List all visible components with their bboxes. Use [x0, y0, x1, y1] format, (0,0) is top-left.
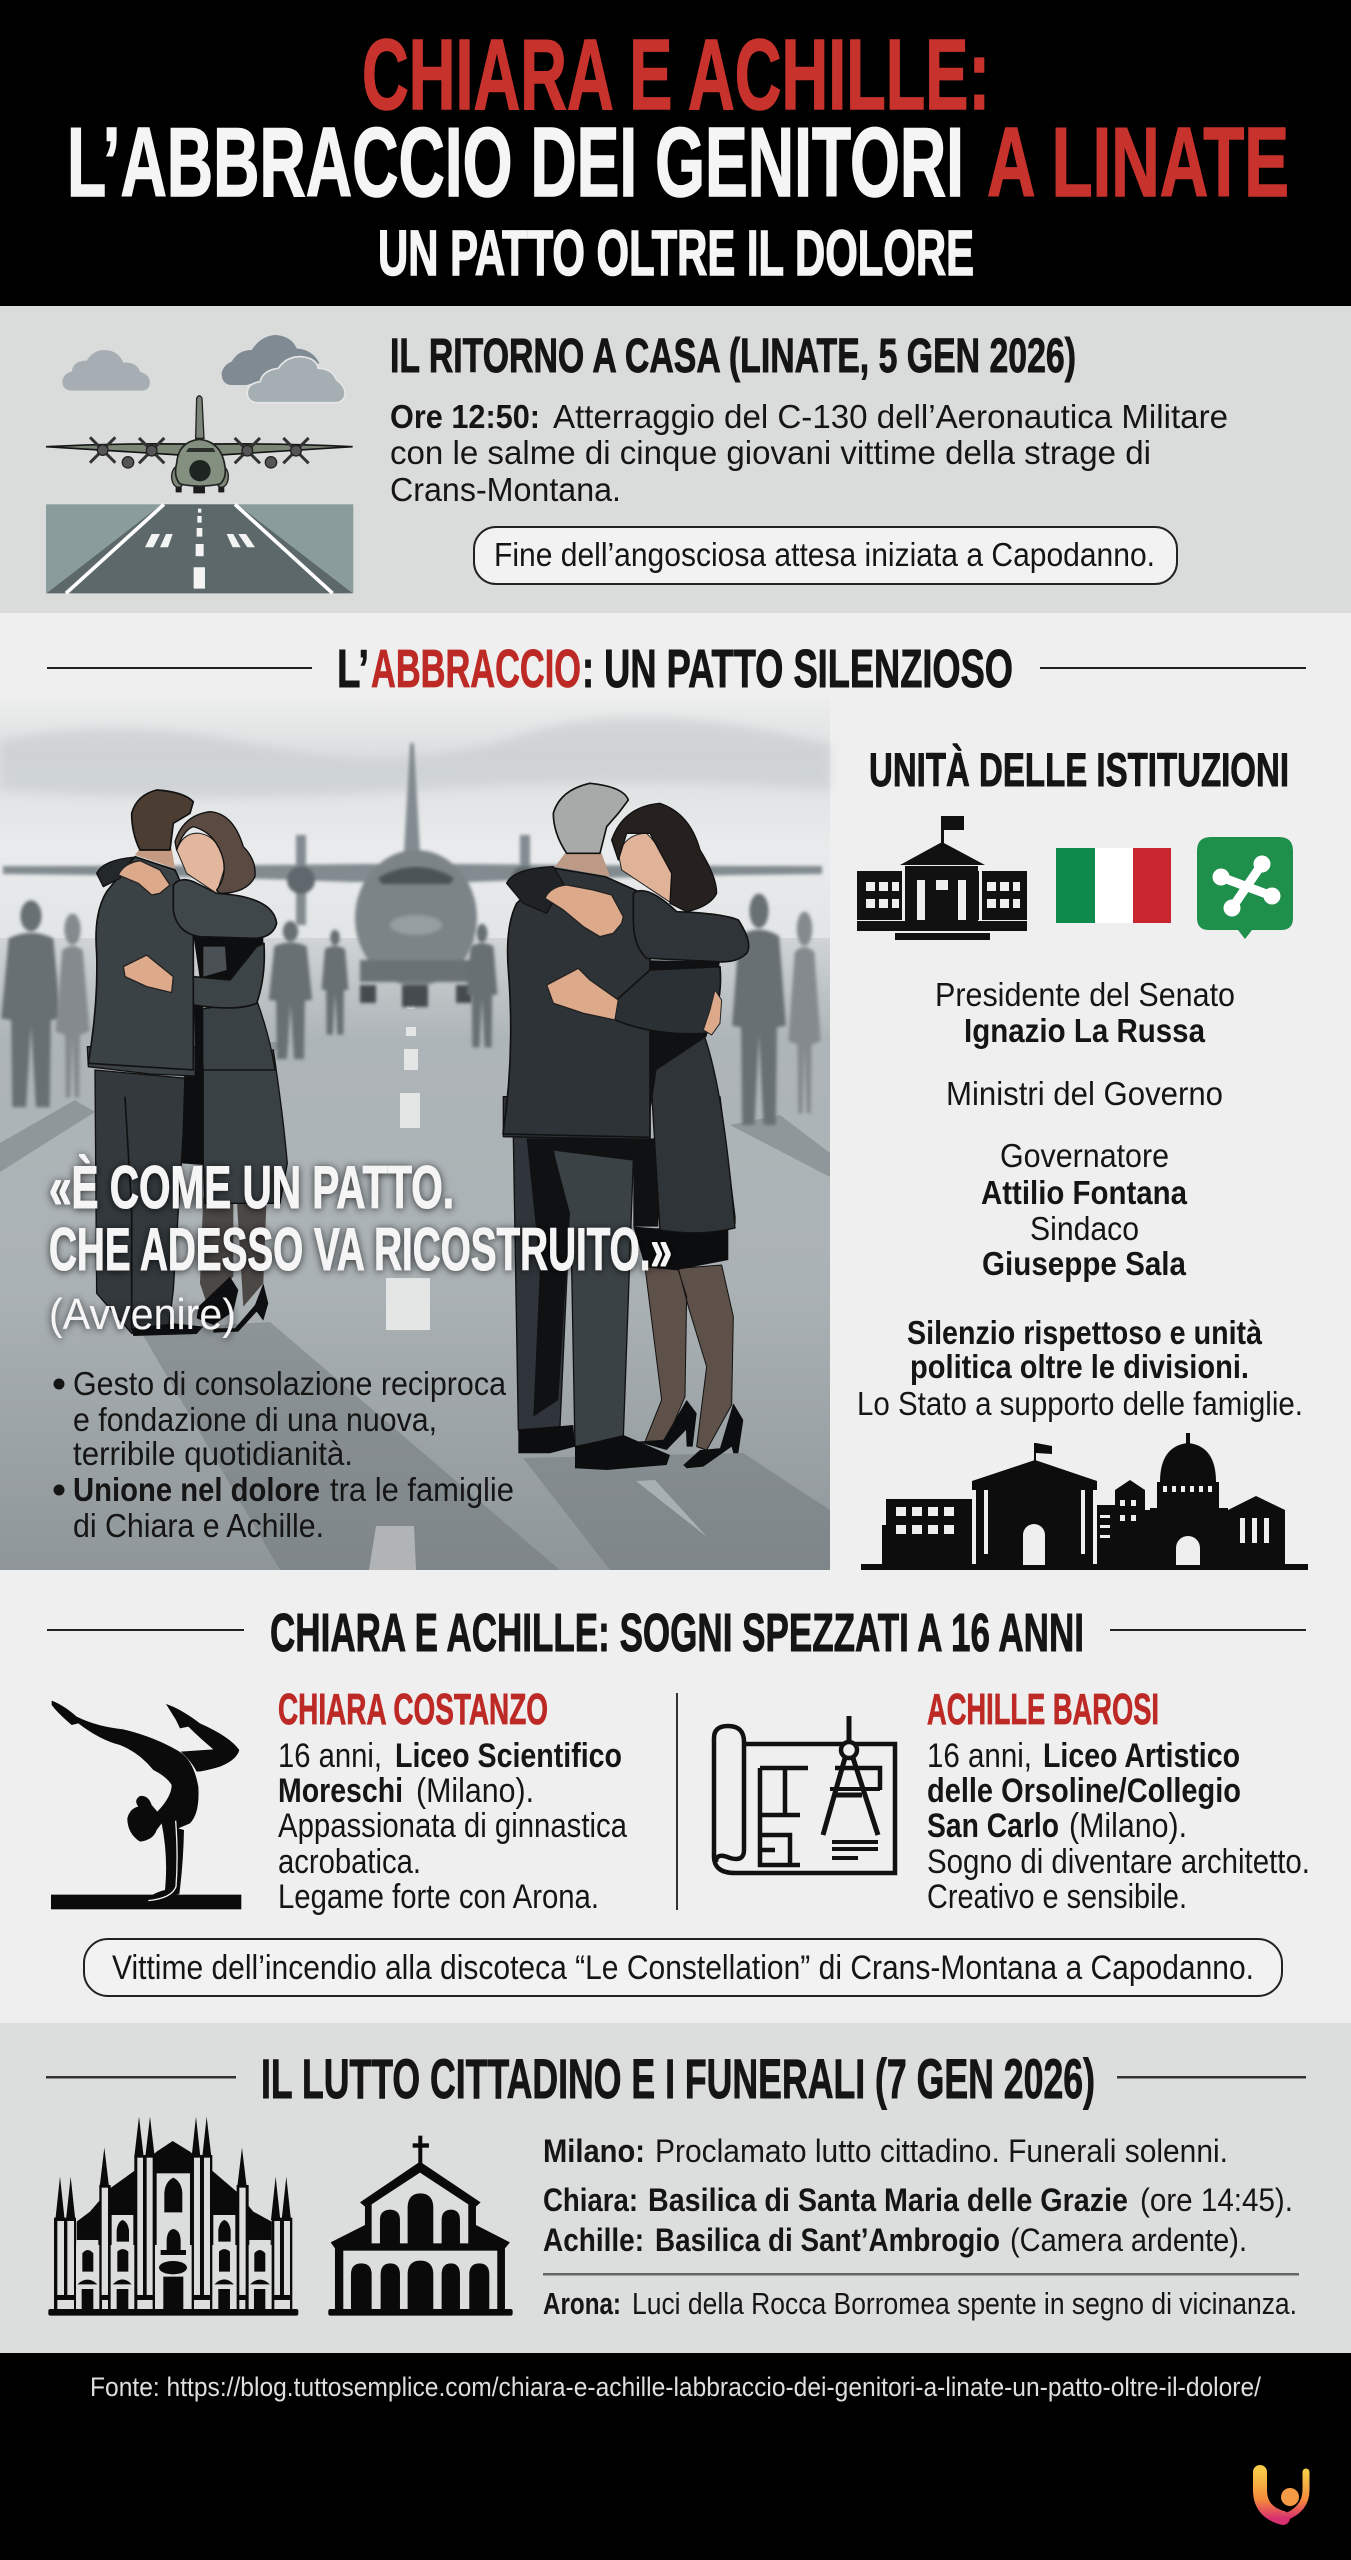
quote: CHE ADESSO VA RICOSTRUITO.»: [49, 1216, 672, 1283]
icon: duomo di milano: [48, 2117, 298, 2316]
text: achille barosi: 16 anni,: [927, 1737, 1032, 1775]
illustration: genitori abbracciati sulla pista: [0, 693, 830, 1570]
quote: [49, 1154, 672, 1339]
callout: fine dell'attesa: Fine dell’angosciosa attesa iniziata a Capodanno.: [494, 536, 1155, 573]
text: chiara e achille funerali: Basilica di Sant’Ambrogio: [655, 2222, 1000, 2258]
text: chiara e achille funerali: (ore 14:45).: [1140, 2182, 1293, 2218]
text: chiara e achille funerali: (Camera ardente).: [1010, 2222, 1247, 2258]
text: autorità presenti: Ignazio La Russa: [964, 1012, 1206, 1049]
text: autorità presenti: Ministri del Governo: [946, 1075, 1223, 1112]
icon: government building: [857, 816, 1027, 940]
panel: lutto cittadino e funerali: [0, 2023, 1351, 2353]
header title: [67, 19, 1289, 289]
text: chiara costanzo: Appassionata di ginnastica: [278, 1807, 627, 1845]
text: chiara costanzo: 16 anni,: [278, 1737, 382, 1775]
text: atterraggio: con le salme di cinque giovani vittime della strage di: [390, 434, 1151, 471]
text: autorità presenti: Silenzio rispettoso e unità: [907, 1314, 1263, 1351]
text: achille barosi: San Carlo: [927, 1807, 1059, 1845]
text: chiara costanzo: Moreschi: [278, 1772, 403, 1810]
couple: left, upper body: [88, 790, 277, 1070]
panel: l'abbraccio: [0, 613, 1351, 1590]
text: autorità presenti: Lo Stato a supporto delle famiglie.: [857, 1385, 1303, 1422]
text: achille barosi: ACHILLE BAROSI: [927, 1685, 1159, 1734]
text: chiara e achille funerali: Basilica di Santa Maria delle Grazie: [648, 2182, 1128, 2218]
bullets: gesto di consolazione: di Chiara e Achille.: [73, 1507, 324, 1544]
bullets: gesto di consolazione: [54, 1365, 514, 1544]
background plane: [3, 742, 822, 1007]
icon: skyline: [861, 1433, 1308, 1570]
callout: vittime dell'incendio: [84, 1939, 1282, 1996]
text: achille barosi: [927, 1685, 1310, 1916]
text: milano: Milano:: [543, 2133, 645, 2169]
icon: logo: [1260, 2472, 1306, 2518]
quote: (Avvenire): [49, 1290, 236, 1339]
text: achille barosi: (Milano).: [1069, 1807, 1187, 1845]
text: achille barosi: delle Orsoline/Collegio: [927, 1772, 1241, 1810]
text: milano: Proclamato lutto cittadino. Funerali solenni.: [655, 2133, 1228, 2169]
icon: clouds, plane and runway: [46, 335, 353, 593]
icon: blueprint and compass: [714, 1716, 895, 1873]
icon: lombardy emblem: [1197, 837, 1293, 939]
text: atterraggio: Atterraggio del C-130 dell’Aeronautica Militare: [553, 398, 1228, 435]
text: chiara costanzo: (Milano).: [416, 1772, 534, 1810]
panel: il ritorno a casa: [0, 306, 1351, 613]
couple: left, legs: [87, 1047, 287, 1336]
heading: l'abbraccio un patto silenzioso: : UN PATTO SILENZIOSO: [582, 639, 1013, 699]
icon: gymnast: [51, 1701, 241, 1909]
text: autorità presenti: Giuseppe Sala: [982, 1245, 1187, 1282]
bullets: gesto di consolazione: Gesto di consolazione reciproca: [73, 1365, 507, 1402]
heading: l'abbraccio un patto silenzioso: ABBRACCIO: [371, 639, 581, 699]
text: chiara costanzo: Liceo Scientifico: [395, 1737, 622, 1775]
icon: italian flag: [1056, 848, 1171, 923]
text: atterraggio: Ore 12:50:: [390, 398, 540, 435]
text: chiara e achille funerali: [543, 2182, 1293, 2258]
text: autorità presenti: Presidente del Senato: [935, 976, 1235, 1013]
text: chiara costanzo: CHIARA COSTANZO: [278, 1685, 548, 1734]
text: autorità presenti: Governatore: [1000, 1137, 1169, 1174]
bullets: gesto di consolazione: e fondazione di una nuova,: [73, 1401, 437, 1438]
bullets: gesto di consolazione: tra le famiglie: [330, 1471, 514, 1508]
text: atterraggio: Crans-Montana.: [390, 471, 621, 508]
text: chiara costanzo: [278, 1685, 627, 1916]
couple: right, legs: [503, 1097, 743, 1470]
shadows: [0, 1041, 830, 1570]
source line: Fonte: https://blog.tuttosemplice.com/chiara-e-achille-labbraccio-dei-genitori-a-linate-un-patto-oltre-il-dolore/: [90, 2372, 1261, 2402]
text: chiara e achille funerali: Achille:: [543, 2222, 644, 2258]
runway dashes: [369, 1000, 430, 1570]
text: achille barosi: Creativo e sensibile.: [927, 1878, 1187, 1916]
couple: right, upper body: [503, 783, 749, 1233]
callout: fine dell'attesa: [474, 527, 1177, 584]
text: autorità presenti: [857, 976, 1303, 1422]
background people: [1, 894, 786, 1125]
heading: il ritorno a casa: IL RITORNO A CASA (LINATE, 5 GEN 2026): [390, 330, 1076, 383]
bullets: gesto di consolazione: terribile quotidianità.: [73, 1435, 353, 1472]
text: chiara costanzo: Legame forte con Arona.: [278, 1878, 599, 1916]
text: achille barosi: Liceo Artistico: [1043, 1737, 1240, 1775]
text: chiara costanzo: acrobatica.: [278, 1843, 421, 1881]
text: chiara e achille funerali: Chiara:: [543, 2182, 638, 2218]
header title: UN PATTO OLTRE IL DOLORE: [378, 217, 974, 289]
bullets: gesto di consolazione: Unione nel dolore: [73, 1471, 320, 1508]
panel: sogni spezzati: [0, 1590, 1351, 2023]
text: autorità presenti: Sindaco: [1030, 1210, 1139, 1247]
quote: «È COME UN PATTO.: [49, 1154, 454, 1221]
header title: CHIARA E ACHILLE:: [362, 19, 990, 131]
text: autorità presenti: politica oltre le divisioni.: [910, 1348, 1249, 1385]
icon: basilica: [328, 2136, 513, 2316]
text: atterraggio: [390, 398, 1228, 508]
heading: l'abbraccio un patto silenzioso: L’: [337, 639, 369, 699]
text: autorità presenti: Attilio Fontana: [981, 1174, 1188, 1211]
text: arona: Arona:: [543, 2286, 621, 2321]
heading: l'abbraccio un patto silenzioso: [47, 639, 1306, 699]
